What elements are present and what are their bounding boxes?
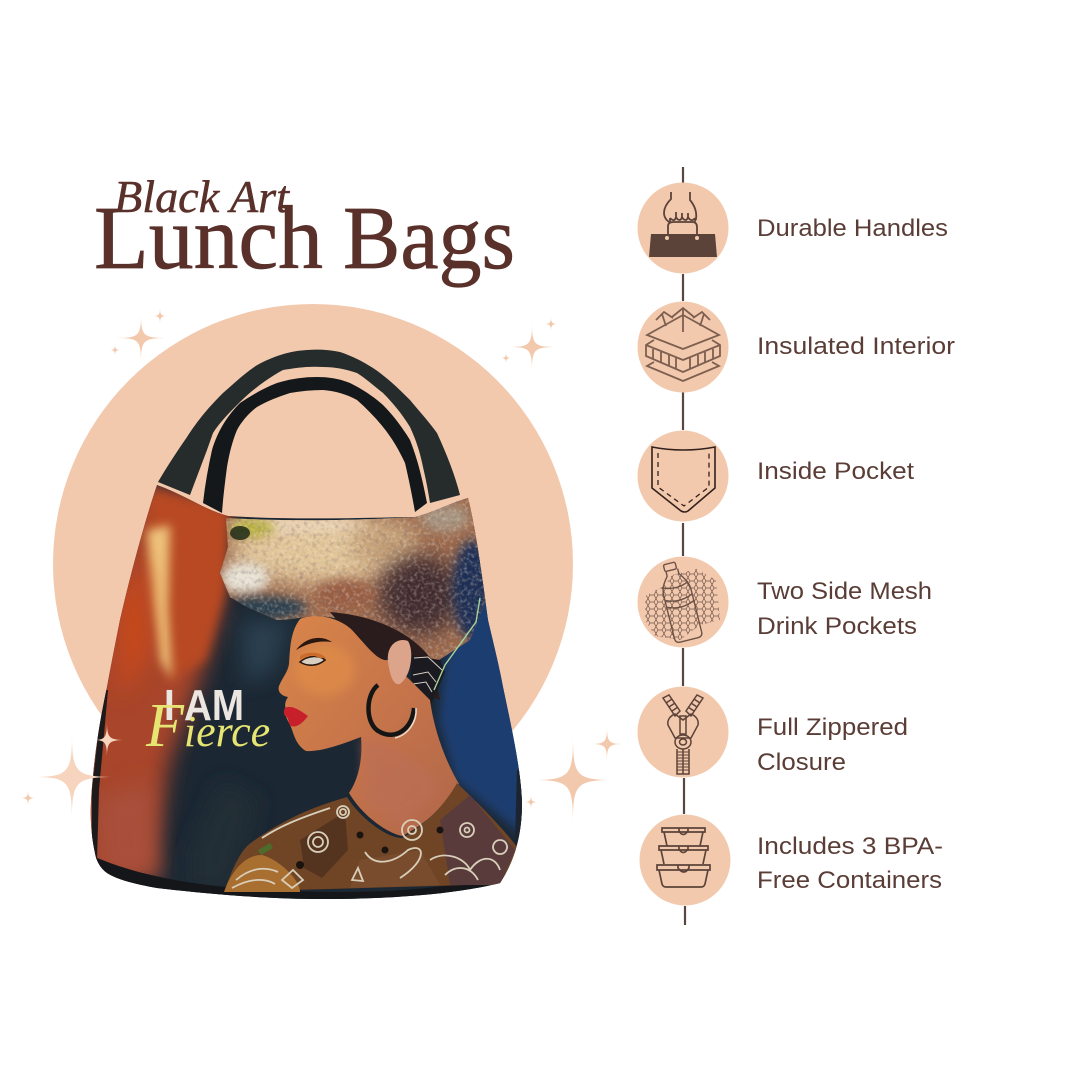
label: Closure	[757, 749, 846, 776]
lips	[284, 707, 308, 727]
lunch bag product image	[80, 350, 540, 905]
inner handle	[203, 377, 427, 513]
dark teal centre	[195, 804, 242, 895]
feature: inside pocket	[638, 430, 914, 522]
label: Durable Handles	[757, 215, 948, 242]
woman portrait	[279, 598, 480, 836]
feature: mesh pockets	[638, 556, 932, 648]
label: Includes 3 BPA-	[757, 833, 943, 860]
bottom hem	[96, 858, 506, 899]
label: Drink Pockets	[757, 613, 917, 640]
timeline vertical line	[683, 167, 685, 925]
peach background circle	[53, 304, 573, 824]
neck and face	[279, 616, 459, 836]
short side hair	[330, 612, 440, 700]
back of head zigzag	[410, 656, 445, 705]
bag handles	[158, 350, 460, 513]
left red panel	[80, 470, 225, 880]
label	[757, 833, 943, 894]
main heading: Lunch: Lunch	[94, 189, 323, 288]
sparkles around the circle	[19, 307, 624, 810]
icon: pocket	[638, 430, 728, 522]
label: Full Zippered	[757, 714, 908, 741]
icon: bottle with mesh	[638, 556, 728, 648]
sparkles overlapping the bag	[32, 721, 614, 822]
feature: zippered closure	[638, 686, 908, 778]
patterned garment	[224, 783, 518, 892]
title	[94, 171, 515, 288]
label	[757, 714, 908, 776]
script heading: Black Art: Black Art	[114, 171, 290, 222]
afro hair	[220, 498, 486, 660]
bag body	[90, 485, 522, 899]
icon: hand holding bag	[638, 182, 728, 274]
label: Two Side Mesh	[757, 578, 932, 605]
feature: insulated interior	[638, 302, 955, 392]
label: Free Containers	[757, 867, 942, 894]
icon: zipper	[638, 686, 728, 778]
face shading	[300, 648, 354, 694]
icon: stacked containers	[640, 814, 730, 906]
I AM Fierce slogan: Fierce	[145, 692, 270, 760]
main heading: Bags: Bags	[343, 189, 515, 288]
eyebrow	[296, 638, 332, 650]
yellow streak	[147, 525, 172, 680]
green outline	[434, 598, 480, 690]
outer handle	[158, 350, 460, 503]
feature: containers	[640, 814, 943, 906]
right blue panel	[433, 580, 522, 836]
label: Insulated Interior	[757, 333, 955, 360]
feature: durable handles	[638, 182, 948, 274]
eye	[300, 656, 325, 665]
hoop earring	[368, 685, 414, 735]
label	[757, 578, 932, 640]
icon: insulated layers	[638, 302, 728, 392]
ear	[388, 640, 411, 684]
label: Inside Pocket	[757, 458, 914, 485]
I AM Fierce slogan: I AM	[164, 681, 244, 730]
